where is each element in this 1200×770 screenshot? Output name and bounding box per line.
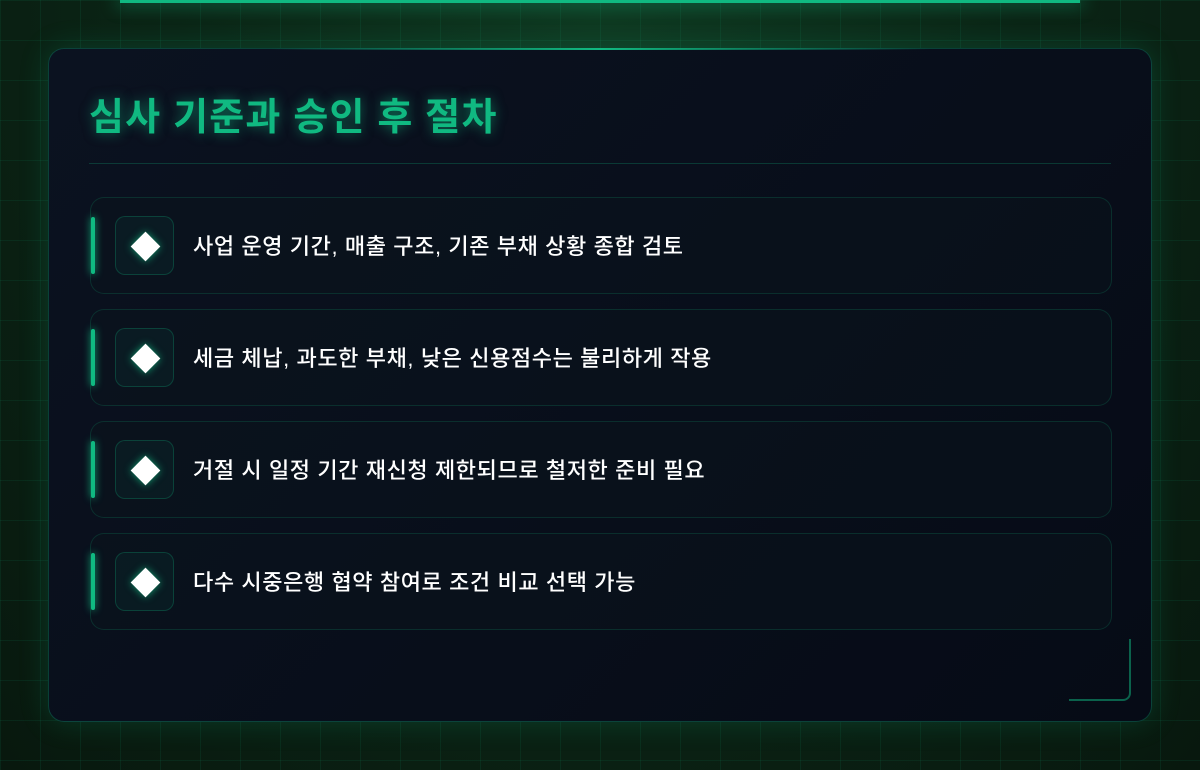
- text: item 4: 다수 시중은행 협약 참여로 조건 비교 선택 가능: [193, 570, 636, 595]
- corner bracket decoration: [1069, 639, 1131, 701]
- item 1: [90, 197, 1112, 294]
- item 3: [90, 421, 1112, 518]
- icon: diamond: [115, 216, 174, 275]
- icon: diamond: [115, 440, 174, 499]
- item 4: [90, 533, 1112, 630]
- icon: diamond: [115, 328, 174, 387]
- text: item 2: 세금 체납, 과도한 부채, 낮은 신용점수는 불리하게 작용: [193, 346, 712, 371]
- text: item 1: 사업 운영 기간, 매출 구조, 기존 부채 상황 종합 검토: [193, 234, 684, 259]
- icon: diamond: [115, 552, 174, 611]
- title: 심사 기준과 승인 후 절차: [89, 97, 498, 139]
- text: item 3: 거절 시 일정 기간 재신청 제한되므로 철저한 준비 필요: [193, 458, 705, 483]
- item 2: [90, 309, 1112, 406]
